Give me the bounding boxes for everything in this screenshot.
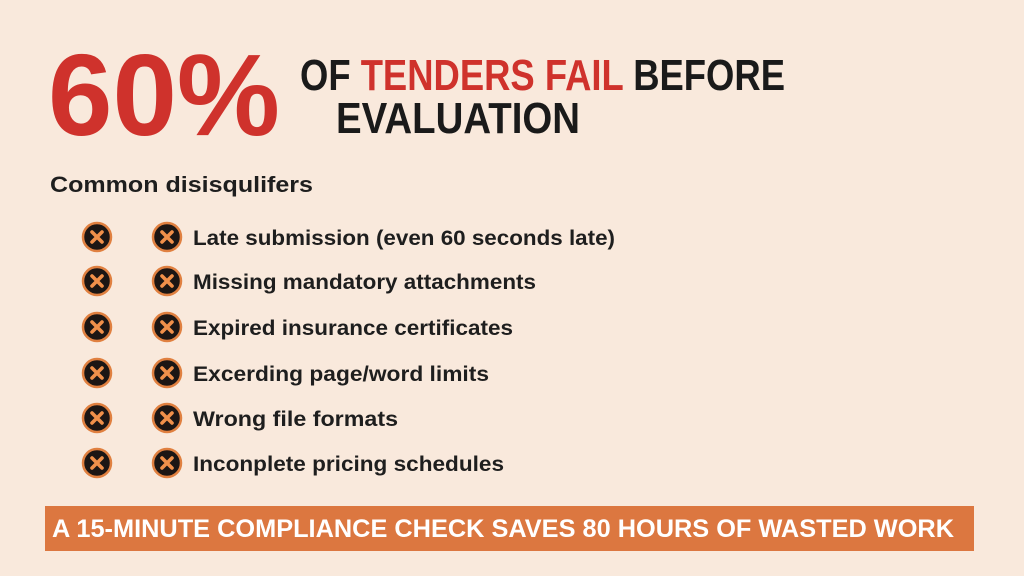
heading: of tenders fail before evaluation: EVALUATION (336, 94, 580, 143)
item: missing attachments: Missing mandatory attachments (193, 271, 536, 294)
item: incomplete pricing: Inconplete pricing schedules (193, 453, 504, 476)
item: wrong formats: Wrong file formats (193, 408, 398, 431)
item: wrong formats (83, 404, 398, 432)
item: late submission (83, 223, 615, 251)
item: exceeding limits: Excerding page/word limits (193, 363, 489, 386)
heading: of tenders fail before evaluation: OF TENDERS FAIL BEFORE (300, 51, 785, 100)
banner: compliance check: A 15-MINUTE COMPLIANCE CHECK SAVES 80 HOURS OF WASTED WORK (52, 515, 954, 543)
title: 60%: 60% (48, 30, 280, 160)
item: incomplete pricing (83, 449, 504, 477)
list of disqualifiers (83, 223, 615, 477)
item: exceeding limits (83, 359, 489, 387)
heading: of tenders fail before evaluation (300, 51, 785, 143)
item: late submission: Late submission (even 60 seconds late) (193, 227, 615, 250)
item: expired insurance (83, 313, 513, 341)
item: expired insurance: Expired insurance certificates (193, 317, 513, 340)
item: missing attachments (83, 267, 536, 295)
subheading: Common disisqulifers (50, 172, 313, 197)
banner: compliance check (45, 506, 974, 551)
